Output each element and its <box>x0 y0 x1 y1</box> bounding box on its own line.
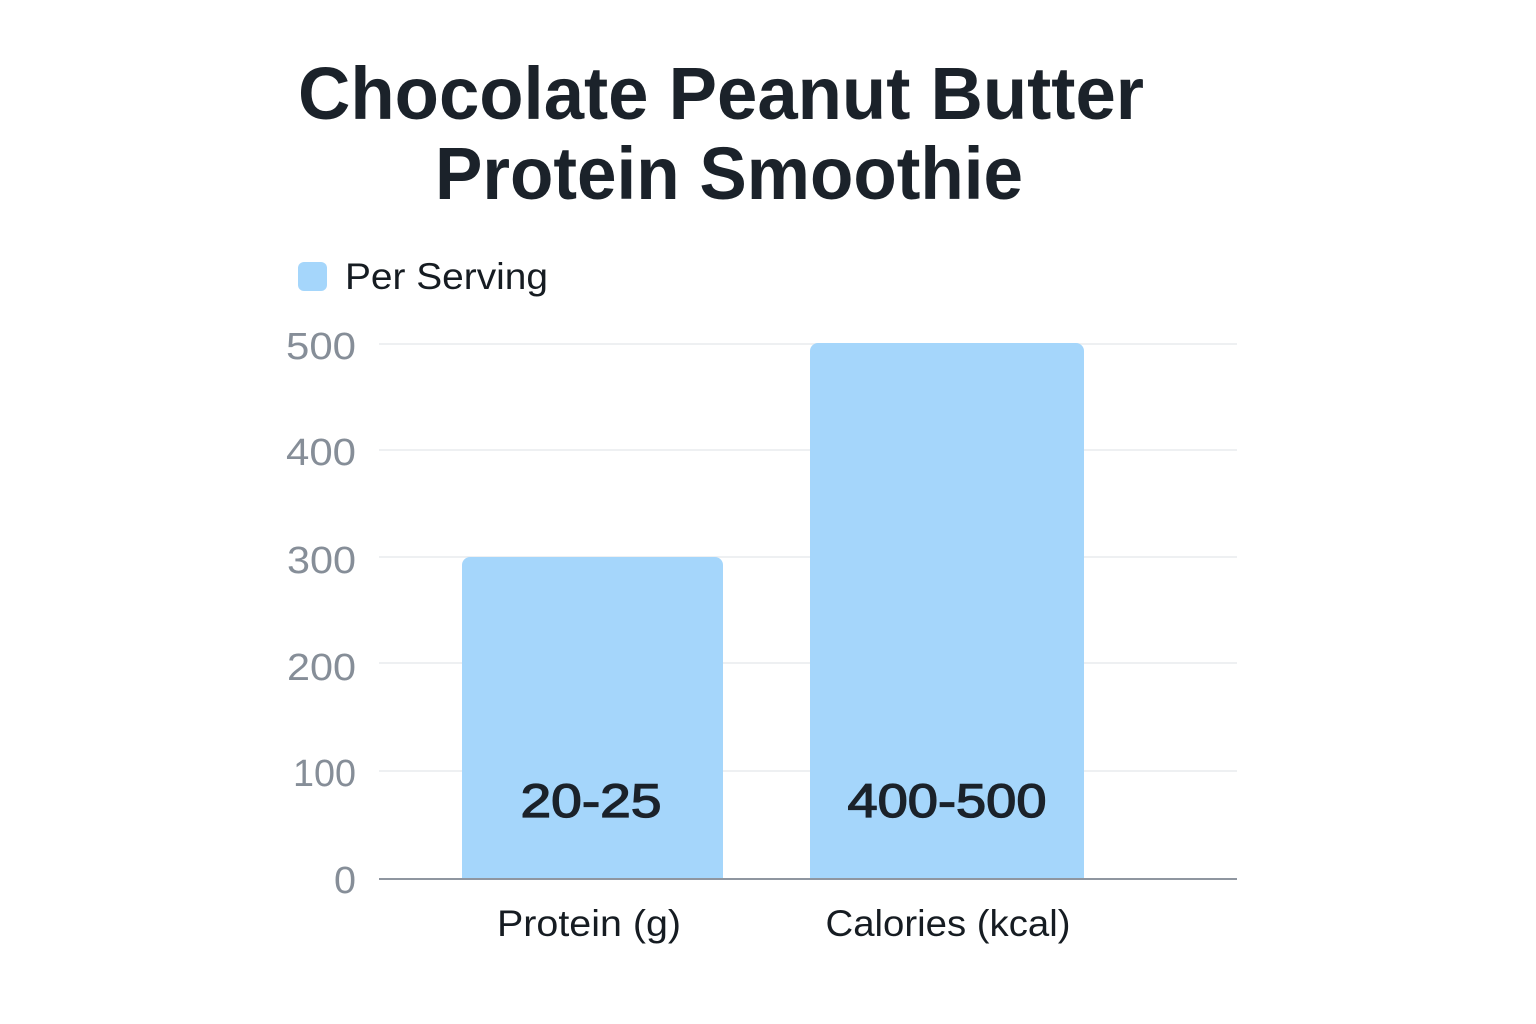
y axis labels: 500 <box>286 326 356 368</box>
legend: Per Serving <box>345 256 548 297</box>
y axis labels <box>286 326 356 902</box>
y axis labels: 0 <box>334 860 356 902</box>
title: Protein Smoothie <box>435 132 1023 215</box>
y axis labels: 200 <box>287 647 356 689</box>
x axis labels: Calories (kcal) <box>826 903 1070 944</box>
y axis labels: 100 <box>293 753 356 795</box>
x axis labels <box>497 903 1070 944</box>
x axis labels: Protein (g) <box>497 903 681 944</box>
bar value labels: 400-500 <box>848 774 1046 827</box>
bar value labels: 20-25 <box>520 774 662 827</box>
bar: protein <box>462 557 723 879</box>
bar chart <box>286 326 1237 944</box>
x axis line <box>379 878 1237 880</box>
bar: calories <box>810 343 1084 879</box>
bar value labels <box>520 774 1046 827</box>
title: Chocolate Peanut Butter <box>298 52 1144 135</box>
y axis labels: 300 <box>287 540 356 582</box>
y axis labels: 400 <box>286 432 356 474</box>
title <box>298 52 1144 215</box>
